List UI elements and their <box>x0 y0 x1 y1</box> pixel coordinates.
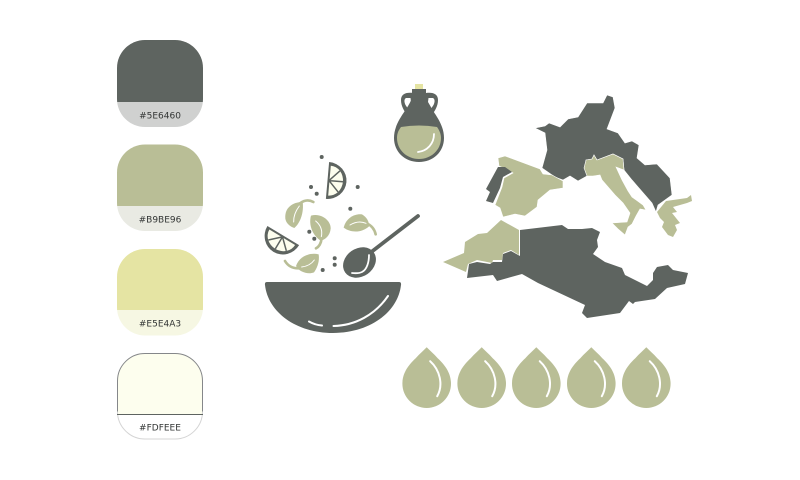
olive oil drops row <box>402 347 671 408</box>
bowl <box>265 282 401 333</box>
swatch: dark grey #5E6460 <box>117 40 203 127</box>
swatch: olive #B9BE96 <box>117 144 203 231</box>
drop 3 <box>512 347 561 408</box>
Italy <box>584 154 646 235</box>
drop 1 <box>402 347 451 408</box>
Greece <box>657 195 692 237</box>
Spain <box>495 156 563 217</box>
icon: olive oil jar <box>394 84 444 162</box>
North Africa <box>467 225 688 318</box>
spoon <box>337 216 418 284</box>
Morocco <box>443 220 519 272</box>
France, central Europe and Balkans <box>535 95 672 212</box>
icon: salad bowl with falling ingredients <box>258 155 418 333</box>
Portugal <box>486 167 512 203</box>
infographic canvas <box>117 40 692 440</box>
lime slice lower <box>258 226 299 261</box>
swatch: dark grey #5E6460: #5E6460 <box>139 112 181 122</box>
drop 5 <box>622 347 671 408</box>
drop 2 <box>457 347 506 408</box>
drop 4 <box>567 347 616 408</box>
swatch: pale yellow #E5E4A3 <box>117 249 203 336</box>
swatch: olive #B9BE96: #B9BE96 <box>139 216 182 226</box>
swatch: cream #FDFEEE <box>117 353 203 440</box>
lime slice upper <box>326 162 348 201</box>
map: Mediterranean countries <box>443 95 692 318</box>
basil leaves <box>285 200 376 273</box>
swatch: pale yellow #E5E4A3: #E5E4A3 <box>139 320 181 330</box>
swatch: cream #FDFEEE: #FDFEEE <box>139 424 181 434</box>
pepper dots <box>307 155 360 272</box>
